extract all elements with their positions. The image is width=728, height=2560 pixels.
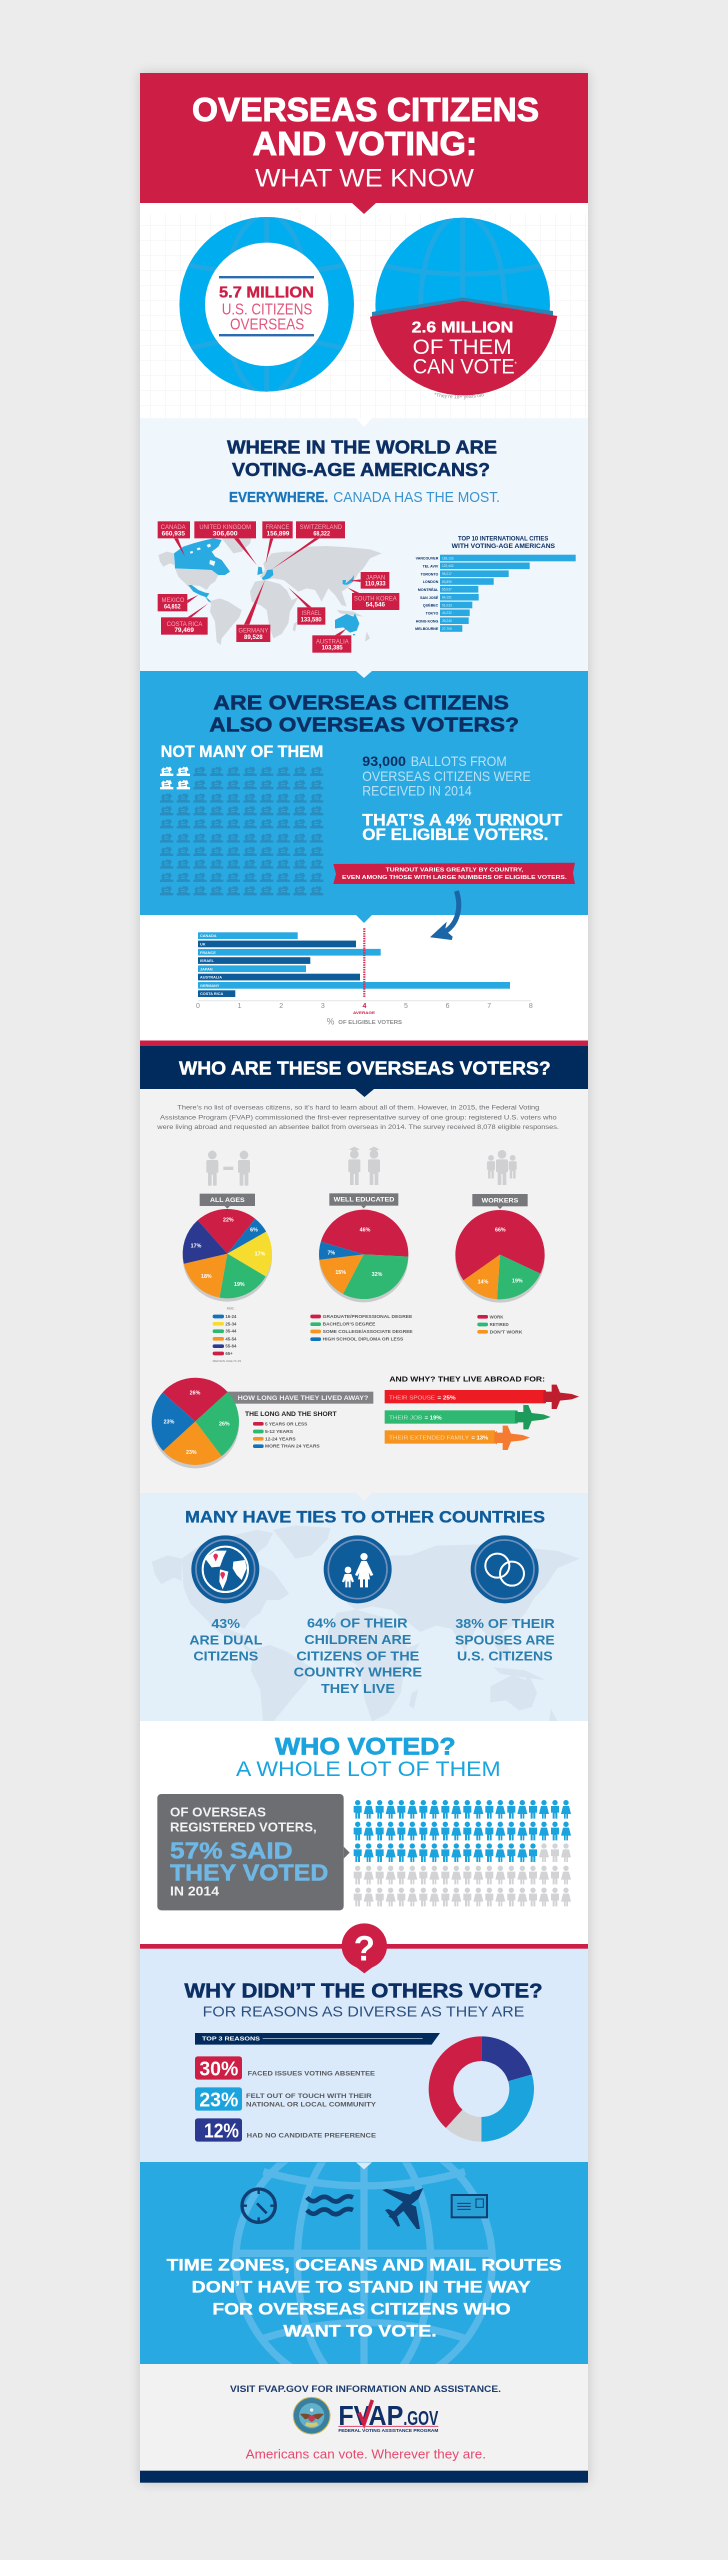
panel: where in the world xyxy=(140,418,588,671)
world map with country callouts: COSTA RICA xyxy=(167,621,203,628)
legend: years abroad: 5-12 YEARS xyxy=(265,1429,293,1434)
stat: dual citizens: ARE DUAL xyxy=(189,1633,263,1647)
reason: 12 percent: HAD NO CANDIDATE PREFERENCE xyxy=(247,2132,376,2139)
bar chart: top 10 cities: 44,232 xyxy=(442,611,452,615)
heading: EVERYWHERE. xyxy=(229,489,328,506)
group: well educated: HIGH SCHOOL DIPLOMA OR LESS xyxy=(323,1337,403,1342)
world map with country callouts: 133,580 xyxy=(301,617,322,624)
how long abroad and why xyxy=(152,1375,579,1468)
group: all ages: 55-64 xyxy=(225,1344,237,1349)
ribbon callout: EVEN AMONG THOSE WITH LARGE NUMBERS OF ELIGIBLE VOTERS. xyxy=(342,875,567,881)
group: all ages: 19% xyxy=(234,1282,245,1288)
heading: CANADA HAS THE MOST. xyxy=(333,489,500,506)
icon: airplane xyxy=(382,2188,423,2229)
pictogram: 57 of 100 people xyxy=(354,1800,572,1906)
world map with country callouts: SWITZERLAND xyxy=(300,524,342,531)
group: all ages: MEDIAN AGE IS 49 xyxy=(213,1360,242,1363)
bar chart: turnout: CANADA xyxy=(200,934,217,938)
group: well educated: SOME COLLEGE/ASSOCIATE DEGREE xyxy=(323,1329,413,1334)
bar chart: top 10 cities: TOP 10 INTERNATIONAL CITIES xyxy=(458,537,548,543)
panel: turnout by country xyxy=(140,915,588,1041)
bar chart: top 10 cities: SAN JOSÉ xyxy=(420,595,439,600)
logo: FVAP.GOV: .GOV xyxy=(403,2408,439,2430)
heading: WHERE IN THE WORLD ARE xyxy=(227,436,497,457)
panel: why didn't others vote xyxy=(140,1923,588,2162)
group: well educated: 46% xyxy=(360,1228,371,1234)
world map with country callouts: ISRAEL xyxy=(302,610,321,617)
icon: globe with pins xyxy=(191,1535,259,1603)
bar chart: turnout: 8 xyxy=(529,1003,533,1010)
reasons for living abroad xyxy=(385,1375,579,1450)
reason: 12 percent: 12% xyxy=(204,2120,239,2142)
call to action: VISIT FVAP.GOV FOR INFORMATION AND ASSISTANCE. xyxy=(230,2384,501,2394)
bar chart: top 10 cities: HONG KONG xyxy=(416,619,439,623)
pie: years abroad: 26% xyxy=(190,1390,201,1396)
bar chart: turnout: AUSTRALIA xyxy=(200,976,222,980)
bar chart: turnout: FRANCE xyxy=(200,951,216,955)
world map with country callouts: MEXICO xyxy=(162,597,184,604)
legend: years abroad xyxy=(245,1412,337,1449)
group: workers: 66% xyxy=(495,1227,506,1233)
bar chart: turnout: GERMANY xyxy=(200,984,220,988)
world map with country callouts: 79,469 xyxy=(174,627,194,634)
panel: overseas voters xyxy=(140,671,588,915)
ballots stat: OVERSEAS CITIZENS WERE xyxy=(362,768,531,784)
bar chart: turnout: 5 xyxy=(404,1003,408,1010)
bar chart: top 10 cities: 183,133 xyxy=(442,556,454,560)
bar chart: turnout: AVERAGE xyxy=(353,1010,375,1015)
world map with country callouts: 54,546 xyxy=(366,602,385,609)
world map with country callouts xyxy=(158,521,399,653)
group: workers: WORK xyxy=(490,1314,504,1319)
stat: children citizens: 64% OF THEIR xyxy=(307,1617,408,1631)
group: well educated xyxy=(310,1147,413,1342)
reason: 23 percent: NATIONAL OR LOCAL COMMUNITY xyxy=(246,2102,377,2109)
group: well educated: 7% xyxy=(327,1250,335,1256)
logo: FVAP.GOV xyxy=(338,2400,439,2433)
stat: children citizens: COUNTRY WHERE xyxy=(294,1666,422,1680)
pie: years abroad: 23% xyxy=(164,1420,175,1426)
intro paragraph: There’s no list of overseas citizens, so it’s hard to learn about all of them. However, in 2015, the Federal Voting xyxy=(177,1104,540,1111)
group: workers xyxy=(455,1150,545,1334)
closing statement: WANT TO VOTE. xyxy=(283,2322,437,2341)
group: all ages: 65+ xyxy=(225,1351,233,1356)
banner: top 3 reasons xyxy=(195,2033,440,2045)
bar chart: top 10 cities: 51,033 xyxy=(442,603,452,607)
globe ring: 5.7 million: U.S. CITIZENS xyxy=(222,301,312,318)
panel: who voted xyxy=(140,1721,588,1944)
callout: 57 percent xyxy=(157,1794,350,1910)
world map with country callouts: JAPAN xyxy=(366,574,386,581)
bar chart: top 10 cities: MELBOURNE xyxy=(415,627,439,631)
subheading: NOT MANY OF THEM xyxy=(161,743,323,761)
stat: children citizens xyxy=(294,1617,422,1696)
globe with slice: 2.6 million: 2.6 MILLION xyxy=(412,320,513,337)
world map with country callouts: SOUTH KOREA xyxy=(354,596,397,603)
pie: years abroad: 23% xyxy=(186,1450,197,1456)
group: all ages: 18% xyxy=(201,1274,212,1280)
bar chart: top 10 cities: TEL AVIV xyxy=(423,564,439,568)
callout: 57 percent: OF OVERSEAS xyxy=(170,1806,266,1820)
bar chart: top 10 cities: 122,442 xyxy=(442,564,454,568)
bar chart: top 10 cities: 39,240 xyxy=(442,619,452,623)
panel: survey demographics xyxy=(140,1089,588,1493)
heading xyxy=(227,436,500,506)
group: all ages: 22% xyxy=(223,1218,234,1224)
legend: years abroad: 5 YEARS OR LESS xyxy=(265,1421,307,1426)
stat: spouses citizens xyxy=(455,1617,555,1664)
stat: spouses citizens: SPOUSES ARE xyxy=(455,1633,555,1647)
heading xyxy=(184,1981,543,2020)
bar chart: top 10 cities: 27,709 xyxy=(442,627,452,631)
intro paragraph: Assistance Program (FVAP) commissioned the first-ever representative survey of one group: registered U.S. voters who xyxy=(160,1114,557,1121)
icon: wedding rings xyxy=(471,1535,539,1603)
heading: WHO VOTED? xyxy=(275,1733,456,1760)
icon: parent and child xyxy=(324,1535,392,1603)
bar chart: turnout: JAPAN xyxy=(200,967,213,971)
seal: department of defense xyxy=(293,2397,330,2434)
globe with slice: 2.6 million xyxy=(370,218,558,400)
heading: A WHOLE LOT OF THEM xyxy=(236,1758,501,1781)
group: well educated: GRADUATE/PROFESSIONAL DEGREE xyxy=(323,1314,412,1319)
heading: MANY HAVE TIES TO OTHER COUNTRIES xyxy=(185,1507,545,1526)
banner: how long: HOW LONG HAVE THEY LIVED AWAY? xyxy=(238,1395,368,1402)
bar chart: top 10 cities: VANCOUVER xyxy=(416,557,439,561)
bar chart: turnout: % xyxy=(327,1016,335,1027)
panel: footer xyxy=(140,2364,588,2483)
stat: spouses citizens: U.S. CITIZENS xyxy=(457,1650,553,1664)
group: well educated: WELL EDUCATED xyxy=(334,1198,395,1204)
reason: 23 percent: 23% xyxy=(199,2090,239,2112)
panel: closing message xyxy=(140,2162,588,2364)
callout: 57 percent: THEY VOTED xyxy=(170,1860,328,1886)
donut chart xyxy=(429,2036,534,2142)
icon: clock xyxy=(242,2189,275,2222)
bar chart: turnout: 1 xyxy=(238,1003,242,1010)
group: all ages: 25-34 xyxy=(225,1321,237,1326)
group: all ages: 17% xyxy=(255,1252,266,1258)
panel: header xyxy=(140,73,588,214)
icon: waves xyxy=(307,2196,353,2214)
intro paragraph xyxy=(156,1104,559,1131)
pie: years abroad: 26% xyxy=(219,1421,230,1427)
stat: dual citizens xyxy=(189,1617,263,1664)
bar chart: turnout: ISRAEL xyxy=(200,959,215,963)
globe with slice: 2.6 million: CAN VOTE xyxy=(413,354,515,378)
panel: ties to other countries xyxy=(140,1493,588,1734)
page shadow xyxy=(140,73,588,2483)
heading: FOR REASONS AS DIVERSE AS THEY ARE xyxy=(203,2004,525,2020)
bar chart: turnout: COSTA RICA xyxy=(200,992,223,996)
ballots stat: RECEIVED IN 2014 xyxy=(362,782,472,798)
bar chart: top 10 cities: 64,151 xyxy=(442,596,452,600)
stat: dual citizens: 43% xyxy=(211,1617,240,1631)
turnout stat: THAT’S A 4% TURNOUT xyxy=(362,811,562,829)
world map with country callouts: 306,600 xyxy=(213,530,238,537)
ribbon callout xyxy=(333,863,575,884)
arrow: ribbon to chart xyxy=(430,891,459,940)
heading: ALSO OVERSEAS VOTERS? xyxy=(209,714,519,737)
turnout stat: OF ELIGIBLE VOTERS. xyxy=(362,826,548,844)
group: all ages: 6% xyxy=(250,1228,258,1234)
group: all ages: AGE: xyxy=(227,1306,235,1310)
group: well educated: 15% xyxy=(335,1270,346,1276)
title: OVERSEAS CITIZENS xyxy=(192,91,539,128)
legend: years abroad: THE LONG AND THE SHORT xyxy=(245,1412,337,1418)
world map with country callouts: UNITED KINGDOM xyxy=(199,524,251,531)
legend: years abroad: MORE THAN 24 YEARS xyxy=(265,1444,320,1449)
world map with country callouts: AUSTRALIA xyxy=(316,639,349,646)
closing statement: FOR OVERSEAS CITIZENS WHO xyxy=(212,2300,511,2319)
pie charts row xyxy=(183,1147,545,1363)
reasons for living abroad: AND WHY? THEY LIVE ABROAD FOR: xyxy=(389,1375,545,1384)
ballots stat xyxy=(362,753,531,798)
reason: 23 percent xyxy=(195,2087,377,2112)
closing statement xyxy=(167,2256,562,2341)
title: AND VOTING: xyxy=(253,125,477,162)
bar chart: turnout: OF ELIGIBLE VOTERS xyxy=(338,1020,402,1026)
group: all ages: ALL AGES xyxy=(210,1198,245,1204)
reason: 12 percent xyxy=(195,2118,376,2142)
bar chart: top 10 cities: MONTRÉAL xyxy=(418,587,439,592)
bar chart: turnout: 4 xyxy=(362,1003,366,1010)
world map with country callouts: GERMANY xyxy=(238,627,269,634)
reasons for living abroad: THEIR SPOUSE xyxy=(389,1395,435,1401)
reason: 23 percent: FELT OUT OF TOUCH WITH THEIR xyxy=(246,2093,372,2100)
ballots stat: BALLOTS FROM xyxy=(411,753,507,769)
title: WHAT WE KNOW xyxy=(255,165,474,193)
bar chart: top 10 cities: 95,217 xyxy=(442,572,452,576)
panel: who are these voters heading: WHO ARE THESE OVERSEAS VOTERS? xyxy=(179,1058,551,1079)
group: workers: DON’T WORK xyxy=(490,1329,523,1334)
globe ring: 5.7 million xyxy=(177,214,357,394)
bar chart: top 10 cities xyxy=(415,537,576,632)
callout: 57 percent: REGISTERED VOTERS, xyxy=(170,1820,317,1834)
reasons for living abroad: THEIR EXTENDED FAMILY xyxy=(389,1436,469,1442)
world map with country callouts: 89,528 xyxy=(244,634,263,641)
bar chart: top 10 cities: WITH VOTING-AGE AMERICANS xyxy=(452,543,556,550)
turnout stat xyxy=(362,811,562,844)
ribbon callout: TURNOUT VARIES GREATLY BY COUNTRY, xyxy=(386,867,524,873)
bar chart: top 10 cities: TORONTO xyxy=(420,572,438,576)
logo: FVAP.GOV: FEDERAL VOTING ASSISTANCE PROGRAM xyxy=(338,2428,439,2433)
panel: overseas citizen totals xyxy=(140,203,588,418)
bar chart: turnout: 2 xyxy=(279,1003,283,1010)
icon: question mark badge xyxy=(342,1923,387,1973)
icon: question mark badge: ? xyxy=(354,1930,375,1969)
reason: 30 percent: FACED ISSUES VOTING ABSENTEE xyxy=(248,2071,375,2078)
callout: 57 percent: IN 2014 xyxy=(170,1884,219,1898)
reason: 30 percent xyxy=(195,2056,375,2081)
logo: FVAP.GOV: FVAP xyxy=(338,2400,403,2431)
heading xyxy=(209,691,519,737)
globe ring: 5.7 million: 5.7 MILLION xyxy=(219,285,314,302)
legend: years abroad: 12-24 YEARS xyxy=(265,1436,296,1441)
background globe xyxy=(232,2162,496,2364)
heading xyxy=(236,1733,501,1781)
world map with country callouts: CANADA xyxy=(161,524,186,531)
bar chart: turnout xyxy=(196,928,533,1027)
pie: years abroad xyxy=(152,1378,239,1468)
reasons for living abroad: = 13% xyxy=(471,1436,488,1442)
closing statement: TIME ZONES, OCEANS AND MAIL ROUTES xyxy=(167,2256,562,2275)
bar chart: turnout: 0 xyxy=(196,1003,200,1010)
callout: 57 percent: 57% SAID xyxy=(170,1837,293,1863)
globe ring: 5.7 million: OVERSEAS xyxy=(230,316,304,333)
icon: postcard xyxy=(451,2194,488,2218)
stat: children citizens: CITIZENS OF THE xyxy=(296,1649,419,1663)
bar chart: top 10 cities: QUÉBEC xyxy=(423,603,439,608)
bar chart: turnout: 6 xyxy=(446,1003,450,1010)
stat: dual citizens: CITIZENS xyxy=(193,1650,258,1664)
heading: VOTING-AGE AMERICANS? xyxy=(232,459,490,480)
group: well educated: BACHELOR’S DEGREE xyxy=(323,1322,375,1327)
stat: children citizens: CHILDREN ARE xyxy=(304,1633,411,1647)
group: all ages: 45-54 xyxy=(225,1336,237,1341)
group: workers: RETIRED xyxy=(490,1322,509,1327)
reasons for living abroad: = 25% xyxy=(437,1395,456,1401)
title xyxy=(192,91,539,193)
globe with slice: 2.6 million: *They’re 18+ years old xyxy=(434,392,484,400)
panel: who are these voters heading xyxy=(140,1040,588,1089)
group: workers: 14% xyxy=(478,1279,489,1285)
world map with country callouts: 660,935 xyxy=(162,530,185,537)
world map with country callouts: 64,852 xyxy=(164,603,181,610)
reason: 30 percent: 30% xyxy=(199,2059,239,2081)
stat: children citizens: THEY LIVE xyxy=(321,1682,395,1696)
ballots stat: 93,000 xyxy=(362,753,406,769)
globe with slice: 2.6 million: OF THEM xyxy=(413,335,512,359)
reasons for living abroad: = 19% xyxy=(425,1415,442,1421)
group: well educated: 32% xyxy=(372,1272,383,1278)
bar chart: top 10 cities: TOKYO xyxy=(426,611,438,615)
group: all ages: 17% xyxy=(191,1244,202,1250)
intro paragraph: were living abroad and requested an absentee ballot from overseas in 2014. The survey received 8,078 eligible responses. xyxy=(156,1124,559,1131)
bar chart: turnout: 7 xyxy=(487,1003,491,1010)
group: workers: 19% xyxy=(512,1279,523,1285)
banner: top 3 reasons: TOP 3 REASONS xyxy=(202,2037,261,2043)
bar chart: turnout: UK xyxy=(200,942,206,946)
world map with country callouts: 156,899 xyxy=(267,530,290,537)
group: all ages xyxy=(183,1151,272,1363)
world map with country callouts: 110,933 xyxy=(365,580,386,587)
group: workers: WORKERS xyxy=(482,1199,518,1205)
heading: WHY DIDN’T THE OTHERS VOTE? xyxy=(184,1981,543,2003)
closing statement: DON’T HAVE TO STAND IN THE WAY xyxy=(192,2278,531,2297)
world map with country callouts: 103,385 xyxy=(322,645,343,652)
bar chart: top 10 cities: 65,037 xyxy=(442,588,452,592)
tagline: Americans can vote. Wherever they are. xyxy=(246,2446,486,2461)
stat: spouses citizens: 38% OF THEIR xyxy=(455,1617,555,1631)
background world map xyxy=(152,1525,580,1734)
bar chart: top 10 cities: 83,890 xyxy=(442,580,452,584)
ballot icon grid xyxy=(160,767,323,895)
bar chart: top 10 cities: LONDON xyxy=(423,580,439,584)
group: all ages: 16-24 xyxy=(225,1314,237,1319)
banner: how long xyxy=(223,1392,373,1404)
world map with country callouts: 68,322 xyxy=(313,530,330,537)
group: all ages: 35-44 xyxy=(225,1329,237,1334)
heading: ARE OVERSEAS CITIZENS xyxy=(213,691,509,714)
reasons for living abroad: THEIR JOB xyxy=(389,1415,423,1421)
globe with slice: 2.6 million: * xyxy=(514,362,518,368)
world map with country callouts: FRANCE xyxy=(266,524,289,531)
bar chart: turnout: 3 xyxy=(321,1003,325,1010)
